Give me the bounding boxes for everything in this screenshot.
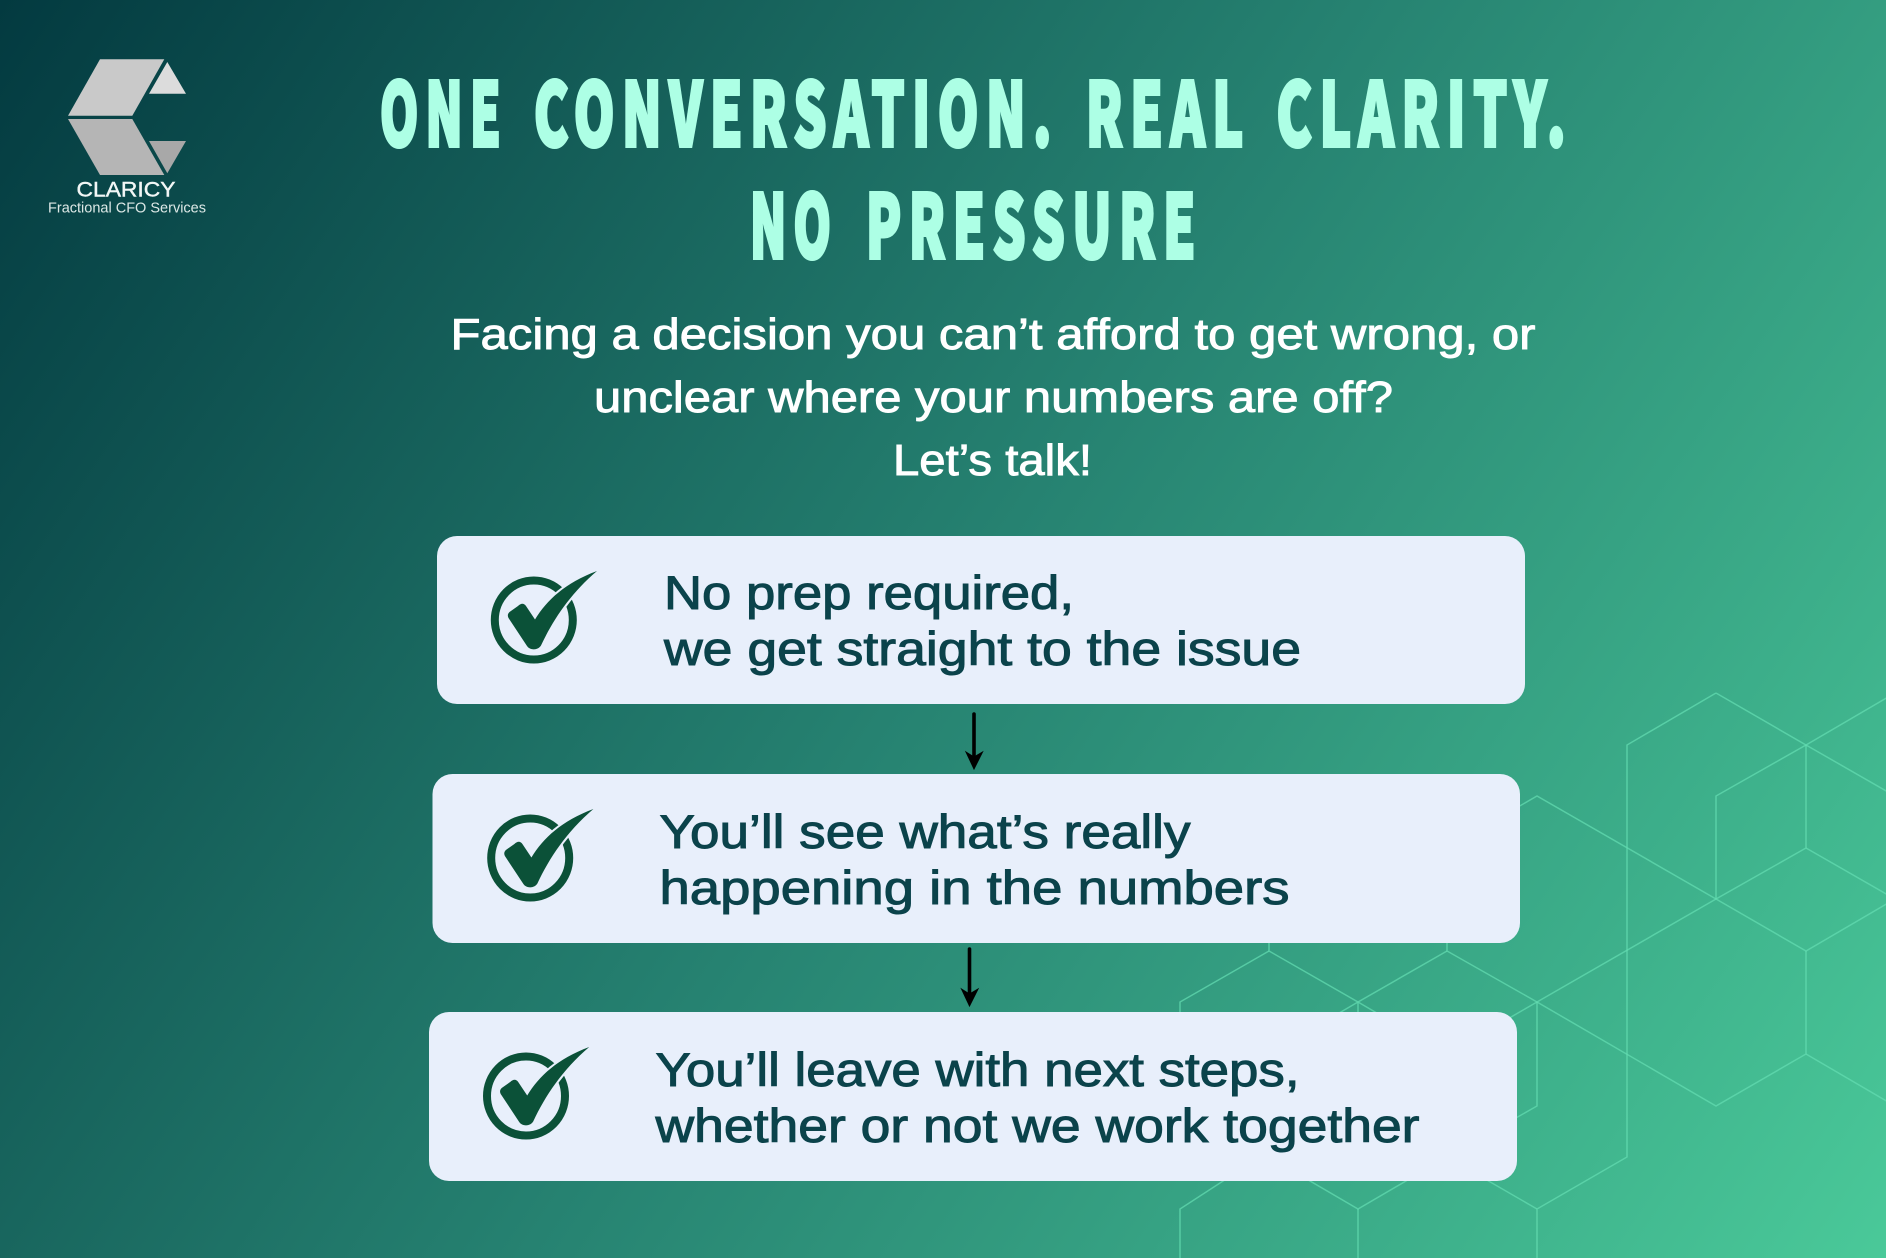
icon: check mark in ring: [491, 809, 593, 898]
title: CLARITY.: [1276, 46, 1574, 172]
text: no prep required: [663, 566, 1301, 675]
title: REAL: [1086, 46, 1251, 172]
arrow: first to second step: [966, 714, 982, 769]
text: no prep required: we get straight to the issue: [663, 622, 1301, 675]
title: CONVERSATION.: [534, 46, 1059, 172]
text: no prep required: No prep required,: [664, 566, 1074, 619]
icon: check mark in ring: [495, 571, 597, 660]
arrow: second to third step: [962, 949, 978, 1006]
logo: Claricy Fractional CFO Services: Fractional CFO Services: [48, 200, 206, 216]
text: see what is happening: happening in the numbers: [660, 861, 1290, 914]
intro text: Facing a decision you can’t afford to get wrong, or: [450, 310, 1536, 359]
title: [380, 46, 1574, 284]
title: PRESSURE: [866, 158, 1203, 284]
icon: check mark in ring: [487, 1047, 589, 1136]
text: see what is happening: [660, 805, 1290, 914]
panel: no prep required: [437, 536, 1525, 704]
text: next steps: whether or not we work together: [654, 1099, 1420, 1152]
intro text: Let’s talk!: [893, 436, 1092, 485]
text: next steps: [654, 1043, 1420, 1152]
intro text: unclear where your numbers are off?: [594, 373, 1393, 422]
logo: Claricy Fractional CFO Services: [48, 59, 206, 216]
title: ONE: [380, 46, 508, 172]
logo: Claricy Fractional CFO Services: CLARICY: [76, 179, 176, 202]
title: NO: [750, 158, 838, 284]
intro text: [450, 310, 1536, 485]
text: see what is happening: You’ll see what’s really: [660, 805, 1191, 858]
text: next steps: You’ll leave with next steps,: [656, 1043, 1300, 1096]
panel: next steps: [429, 1012, 1517, 1181]
panel: see what is happening: [432, 774, 1520, 943]
